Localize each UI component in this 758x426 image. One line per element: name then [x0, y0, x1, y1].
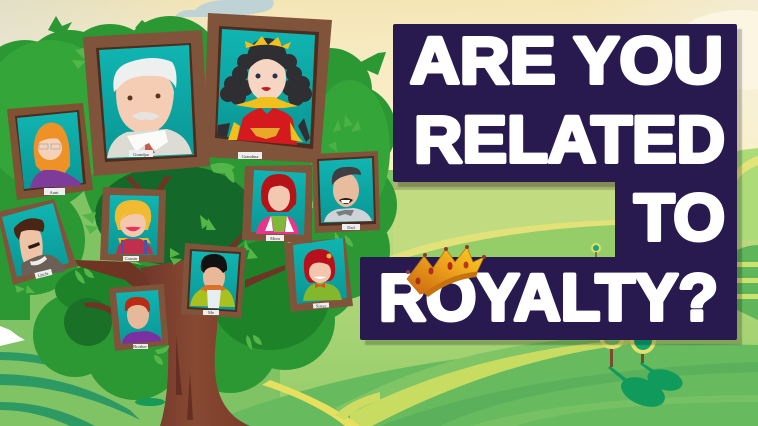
portrait frame: grandpa [83, 30, 210, 176]
portrait frame: dad [312, 151, 380, 233]
portrait frame: mom: Mom [270, 236, 280, 241]
portrait frame: mom [242, 165, 312, 243]
portrait frame: brother: Brother [133, 344, 147, 349]
leaf clusters [15, 47, 361, 365]
portrait frame: uncle: Uncle [37, 271, 49, 278]
background trees [591, 243, 685, 413]
portrait frame: brother [109, 284, 168, 351]
portrait frame: grandpa: Grandpa [133, 152, 149, 157]
title line: royalty: ROYALTY? [379, 260, 718, 334]
rolling green hills [0, 148, 758, 426]
portrait frame: grandma: Grandma [242, 154, 258, 159]
title panel shadow [365, 29, 742, 345]
portrait frame: cousin: Cousin [125, 256, 138, 261]
portrait frame: aunt [7, 103, 93, 200]
portrait frame: uncle [0, 199, 77, 285]
title line: to: TO [634, 180, 725, 254]
title line: are you: ARE YOU [410, 23, 723, 97]
portrait frame: sister: Sister [316, 304, 327, 308]
portrait frame: sister [284, 238, 353, 312]
title panel [360, 23, 737, 340]
portrait frame: me [181, 243, 246, 318]
title line: related: RELATED [414, 102, 725, 176]
icon: gold crown [406, 245, 486, 297]
sky background [0, 0, 758, 240]
tree canopy [0, 16, 397, 406]
portrait frame: me: Me [208, 310, 214, 315]
portrait frame: dad: Dad [347, 225, 355, 230]
portrait frame: aunt: Aunt [50, 190, 59, 195]
portrait frame: cousin [100, 187, 166, 263]
portrait frame: grandma [203, 13, 332, 163]
tree trunk and branches [75, 176, 285, 426]
